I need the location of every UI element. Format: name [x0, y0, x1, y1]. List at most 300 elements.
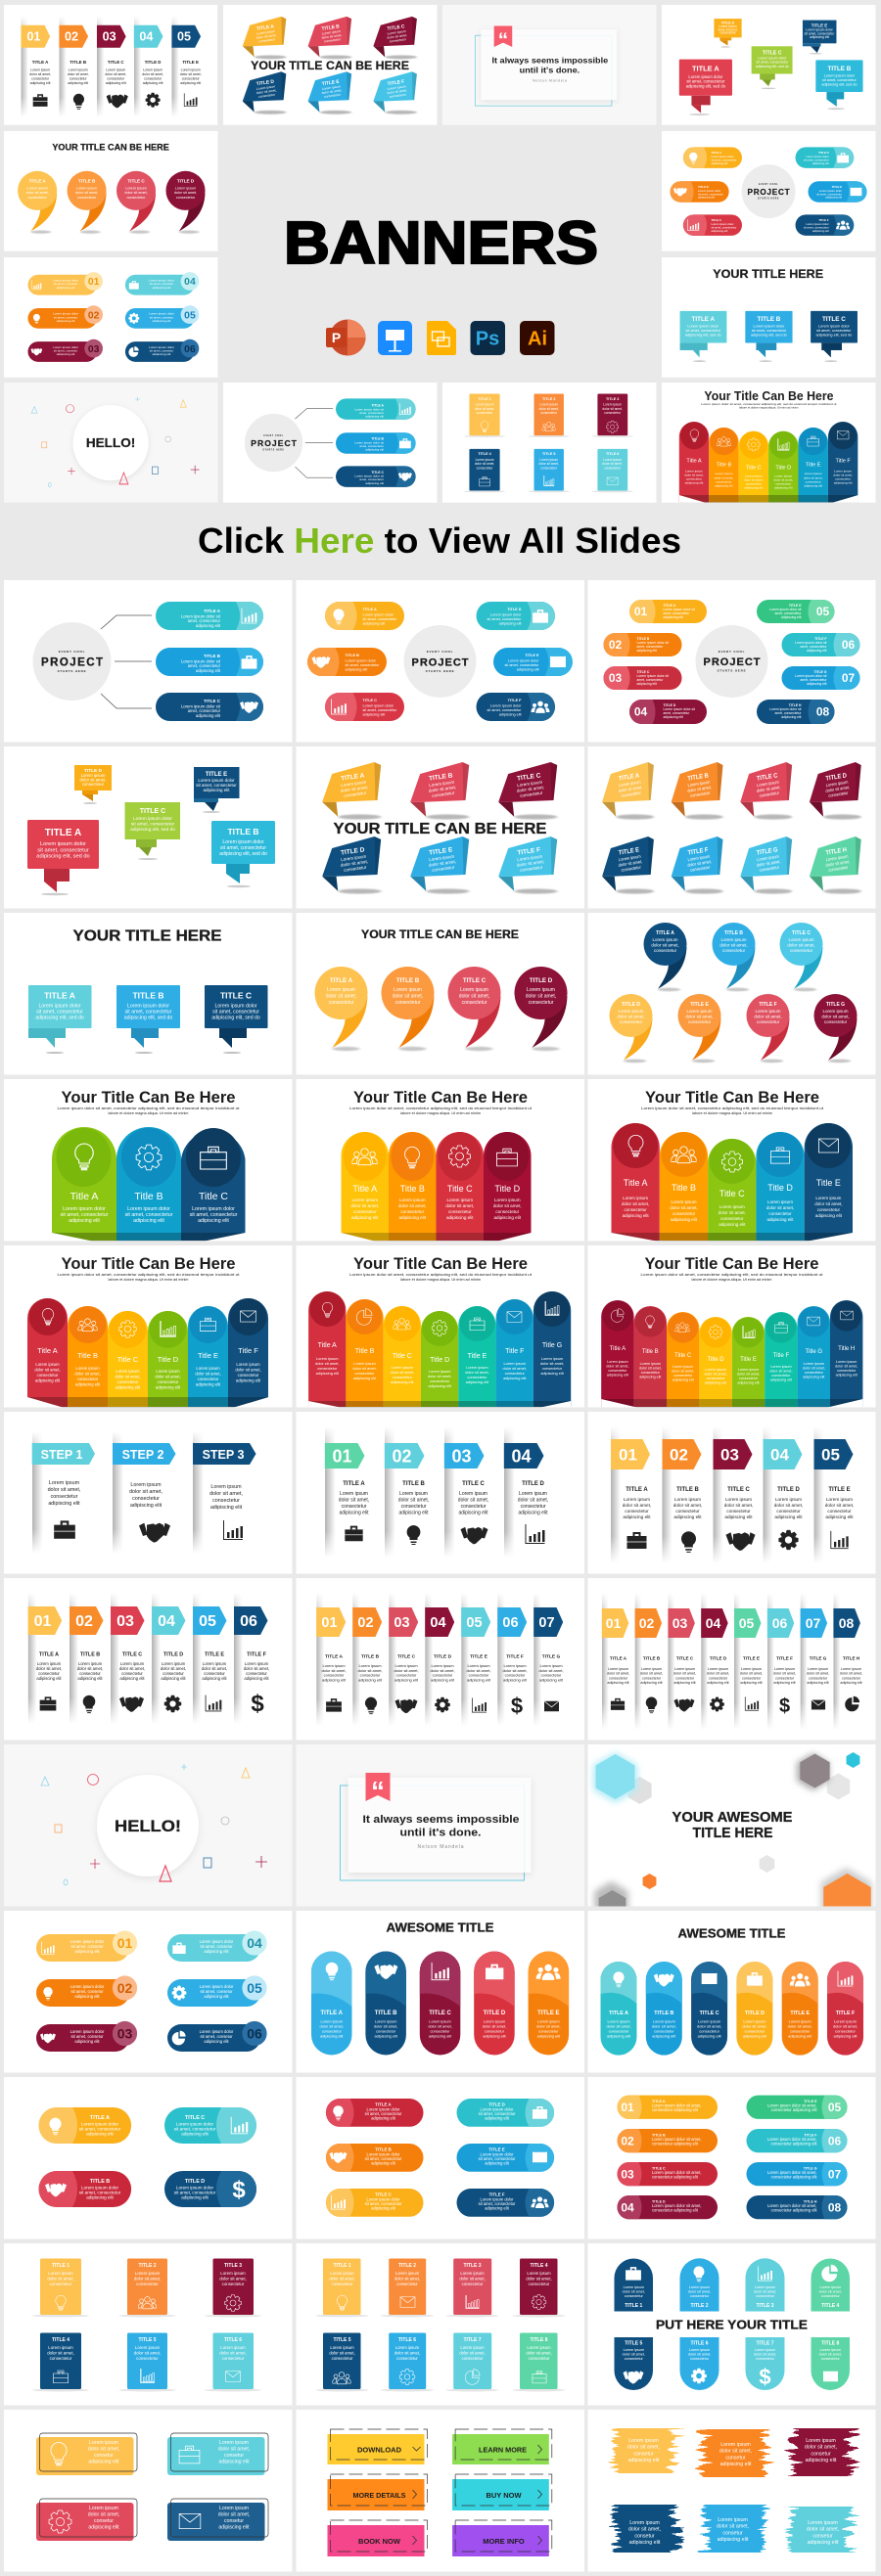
- brush: blue: dolor sit amet,: [717, 2524, 749, 2530]
- arrow: 06: TITLE F: [506, 1653, 524, 1659]
- column: title C: [708, 1139, 756, 1241]
- arrow: 03: 03: [720, 1446, 739, 1464]
- button: more details: MORE DETAILS: [352, 2491, 405, 2500]
- pill: title B: [156, 648, 263, 676]
- column: title A: adipiscing elit: [623, 1213, 649, 1218]
- pill: 06: Lorem ipsum dolor sit amet,: [767, 2137, 816, 2142]
- pill: 01: sit amet, consetur: [70, 1944, 104, 1949]
- column: title A: dolor sit amet,: [315, 1361, 339, 1366]
- arrow: 03: adipiscing elit: [673, 1681, 696, 1685]
- pill: 04: [167, 1930, 267, 1962]
- banner: title C: dolor sit amet,: [757, 785, 781, 793]
- brush: navy: Lorem ipsum: [629, 2520, 660, 2526]
- pill: 03: sit amet, consetur: [70, 2034, 104, 2039]
- card: title 2: TITLE 2: [138, 2263, 157, 2269]
- banner: title D: Lorem ipsum: [341, 854, 367, 862]
- column: title B: adipiscing elit: [75, 1381, 101, 1387]
- arrow: 04: 04: [511, 1446, 532, 1466]
- bubble: title E: [677, 994, 721, 1062]
- arrow: 03: Lorem ipsum: [459, 1491, 487, 1497]
- arch: title 3: dolor sit amet,: [754, 2289, 776, 2293]
- button: book now: [327, 2520, 427, 2556]
- arrow: 05: consectetur: [827, 1509, 852, 1514]
- pill: 07: adipiscing elit: [807, 682, 827, 686]
- bubble: title B: TITLE B: [396, 977, 420, 984]
- pill: 01: Lorem ipsum dolor sit amet,: [652, 2103, 702, 2107]
- bubble: title F: TITLE F: [759, 1002, 777, 1008]
- pill: title F: sit amet, consectetur: [479, 2201, 516, 2206]
- column: title E: Lorem ipsum: [738, 1368, 759, 1372]
- arrow: 05: dolor sit amet,: [740, 1672, 763, 1676]
- arrow: 04: consectetur: [433, 1673, 453, 1678]
- pill: title D: [476, 602, 555, 630]
- arrow: 01: Lorem ipsum: [322, 1663, 346, 1668]
- button: more details: [327, 2474, 427, 2510]
- thumbnail: four speech bubbles: [4, 131, 218, 251]
- arrow: 04: [152, 1606, 186, 1712]
- arrow: 04: 04: [158, 1613, 175, 1630]
- arch: title 7: dolor sit amet,: [754, 2352, 776, 2356]
- column: title C: Title C: [393, 1353, 412, 1360]
- banner: title A: consectetur: [344, 791, 367, 798]
- column: title A: [52, 1127, 116, 1241]
- arch: title 3: [746, 2258, 785, 2311]
- pill: title F: [476, 693, 555, 721]
- pill: 03: 03: [117, 2025, 132, 2041]
- column: title C: Lorem ipsum: [392, 1365, 413, 1370]
- pill: 06: amet, consectetur: [801, 645, 827, 649]
- pill: title A: adipiscing elit: [607, 2033, 631, 2039]
- project circle: EVERY COOL: [59, 650, 85, 654]
- column: title B: Title B: [77, 1351, 98, 1360]
- column: title D: Title D: [767, 1183, 793, 1193]
- column: title C: adipiscing elit: [116, 1385, 141, 1389]
- arrow: 06: consectetur: [505, 1673, 526, 1678]
- column: title C: Lorem ipsum: [446, 1198, 473, 1202]
- thumbnail: three ribbon cards: [662, 257, 876, 378]
- card: title 8: dolor sit amet,: [526, 2350, 552, 2356]
- pill: 02: 02: [621, 2135, 634, 2148]
- column: title D: [699, 1317, 732, 1407]
- pill: 02: Lorem ipsum dolor sit amet,: [652, 2137, 702, 2142]
- arrow: 06: adipiscing elit: [244, 1676, 269, 1681]
- pill: 02: adipiscing elit: [636, 649, 657, 653]
- column: title D: Lorem ipsum: [494, 1198, 521, 1202]
- column: title H: Lorem ipsum: [836, 1360, 857, 1364]
- arrow: 02: TITLE B: [80, 1651, 100, 1657]
- column: title C: adipiscing elit: [198, 1218, 229, 1224]
- column: title F: Lorem ipsum: [236, 1362, 260, 1367]
- bubble: title F: Lorem ipsum: [755, 1009, 781, 1014]
- bubble: title C: TITLE C: [463, 977, 487, 984]
- arrow: 01: [611, 1439, 651, 1549]
- pill: title B: dolor sit amet,: [374, 2023, 397, 2029]
- card: navy mail: adipiscing elit: [218, 2524, 250, 2530]
- pill: 03: TITLE C: [636, 670, 650, 674]
- card: title A: sit amet, consectetur: [36, 1010, 83, 1016]
- pill: 05: [167, 1975, 267, 2007]
- arrow: 05: [193, 1606, 227, 1711]
- pill: 08: Lorem ipsum dolor sit: [769, 707, 802, 711]
- arrow: 03: 03: [116, 1613, 134, 1630]
- pill: title C: sit amet, consectetur: [365, 2201, 402, 2206]
- pill: title C: consectetur: [430, 2029, 450, 2033]
- pill: 06: TITLE F: [804, 2133, 817, 2137]
- column: title A: adipiscing elit: [69, 1218, 100, 1224]
- pill: 01: adipiscing elit: [74, 1949, 100, 1954]
- card: teal briefcase: consetur: [224, 2453, 244, 2459]
- panel: three steps: [4, 1412, 292, 1573]
- button: buy now: BUY NOW: [486, 2491, 522, 2500]
- arrow: 01: [325, 1443, 369, 1541]
- arch: title 7: consectetur: [756, 2357, 775, 2361]
- pill: 01: 01: [634, 605, 647, 618]
- column: title G: adipiscing elit: [803, 1376, 824, 1379]
- pill: title F: adipiscing elit: [833, 2033, 858, 2039]
- pill: title F: sit amet, consectetur: [487, 708, 522, 712]
- arrow: 03: consectetur: [396, 1673, 417, 1678]
- arrow: 02: [70, 1606, 104, 1713]
- author: Nelson Mandela: [417, 1844, 464, 1850]
- arrow: 03: TITLE C: [727, 1487, 750, 1493]
- icon: Google Slides: [427, 321, 456, 355]
- column: title A: dolor sit amet,: [34, 1368, 61, 1372]
- banner: title B: dolor sit amet,: [429, 785, 456, 793]
- panel: six pills: [296, 2077, 584, 2238]
- icon: PowerPoint: P: [332, 330, 341, 345]
- pill: title F: Lorem ipsum dolor: [481, 2197, 514, 2201]
- arch: title 1: dolor sit amet,: [623, 2289, 645, 2293]
- panel: seven speech bubbles: [587, 913, 875, 1074]
- card: title 4: consectetur: [529, 2282, 550, 2286]
- pill: 05: sit amet, consetur: [200, 1989, 233, 1994]
- brush: teal: Lorem ipsum: [808, 2520, 838, 2526]
- card: yellow bulb: [36, 2433, 137, 2475]
- arrow: 06: Lorem ipsum: [245, 1661, 269, 1666]
- title: Your Title Can Be Here: [645, 1088, 819, 1107]
- arrow: 03: TITLE C: [462, 1481, 485, 1487]
- column: title A: consectetur: [625, 1207, 647, 1212]
- pill: title C: adipiscing elit: [698, 2033, 721, 2039]
- arrow: 03: Lorem ipsum: [394, 1663, 418, 1668]
- pill: title A: Lorem ipsum: [607, 2019, 630, 2023]
- pill: title B: Lorem ipsum dolor: [81, 2186, 118, 2190]
- pill: title A: consectetur: [322, 2029, 343, 2033]
- bubble: title A: TITLE A: [656, 930, 674, 936]
- pill: title C: TITLE C: [362, 699, 377, 702]
- column: title C: consectetur: [393, 1375, 413, 1379]
- arrow: 02: 02: [670, 1446, 688, 1464]
- banner: title F: Lorem ipsum: [517, 854, 543, 862]
- button: download: DOWNLOAD: [357, 2446, 402, 2454]
- arrow: 06: [497, 1607, 528, 1718]
- banner: title A: TITLE A: [618, 772, 640, 783]
- pill: title D: sit amet, consectetur: [174, 2190, 216, 2195]
- thumbnail: five numbered arrows: [4, 5, 217, 125]
- column: title E: adipiscing elit: [466, 1379, 489, 1384]
- ribbon: title C: adipiscing elit, sed do: [130, 827, 175, 833]
- arrow: 05: Lorem ipsum: [203, 1661, 227, 1666]
- card: title C: Lorem ipsum dolor: [215, 1004, 257, 1010]
- brush: blue: consetur: [722, 2530, 743, 2536]
- pill: title D: Lorem ipsum: [484, 2019, 505, 2023]
- column: title A: adipiscing elit: [607, 1374, 628, 1378]
- bubble: title B: Lorem ipsum: [720, 937, 747, 942]
- arrow: 01: TITLE A: [626, 1487, 648, 1493]
- arch: title 4: dolor sit amet,: [819, 2289, 842, 2293]
- pill: title C: Lorem ipsum dolor: [362, 704, 394, 708]
- pill: 04: Lorem ipsum dolor sit amet,: [652, 2203, 702, 2208]
- arrow: 04: TITLE D: [163, 1651, 183, 1657]
- pill: 02: amet, consectetur: [636, 645, 664, 649]
- banner: title H: TITLE H: [825, 846, 847, 857]
- column: title C: [437, 1132, 484, 1241]
- banner: title F: dolor sit amet,: [517, 859, 544, 868]
- bubble: title F: [746, 994, 790, 1062]
- column: title G: dolor sit amet,: [540, 1361, 564, 1366]
- arrow: 07: Lorem ipsum: [808, 1667, 828, 1671]
- arrow: 04: Lorem ipsum: [708, 1667, 728, 1671]
- card: title 2: Lorem ipsum: [135, 2271, 161, 2276]
- bubble: title B: [712, 923, 756, 991]
- pill: title B: consectetur: [654, 2029, 674, 2033]
- pill: 04: TITLE D: [664, 703, 676, 707]
- card: title B: [116, 985, 180, 1054]
- column: title E: dolor sit amet,: [195, 1372, 221, 1376]
- column: title B: adipiscing elit: [671, 1217, 698, 1222]
- column: title C: [108, 1311, 148, 1407]
- arrow: 03: consectetur: [675, 1676, 695, 1680]
- arrow: 07: TITLE G: [810, 1655, 827, 1661]
- card: title 3: dolor sit amet,: [219, 2276, 247, 2282]
- column: title G: [533, 1291, 571, 1407]
- pill: title F: TITLE F: [488, 2192, 505, 2197]
- arrow: 02: TITLE B: [643, 1655, 661, 1661]
- arch: title 7: [746, 2337, 785, 2390]
- hexagon: grey halo: [797, 1753, 829, 1790]
- pill: title D: adipiscing elit: [743, 2033, 767, 2039]
- bubble: title D: consectetur: [529, 1000, 554, 1006]
- arrow: 06: $: [251, 1691, 264, 1717]
- icon: PowerPoint: [326, 319, 366, 356]
- card: title 1: Lorem ipsum: [48, 2271, 73, 2276]
- arrow: 05: 05: [466, 1615, 483, 1631]
- arrow: 01: adipiscing elit: [623, 1514, 651, 1519]
- hexagon: light grey: [627, 1777, 652, 1804]
- column: title E: Lorem ipsum: [196, 1366, 220, 1371]
- card: title 4: consectetur: [50, 2356, 72, 2361]
- pill: 01: [617, 2096, 718, 2119]
- pill: 03: adipiscing elit: [74, 2039, 100, 2044]
- pill: title A: [156, 602, 263, 630]
- title: YOUR TITLE HERE: [72, 927, 222, 945]
- banner: title D: dolor sit amet,: [825, 785, 850, 793]
- bubble: title C: dolor sit amet,: [787, 943, 815, 947]
- pill: title D: Lorem ipsum dolor: [481, 2107, 514, 2111]
- pill: title A: [39, 2107, 131, 2144]
- column: title D: [484, 1132, 531, 1241]
- banner: title A: TITLE A: [341, 772, 365, 783]
- bubble: title E: Lorem ipsum: [686, 1009, 713, 1014]
- column: title B: Lorem ipsum dolor: [127, 1206, 170, 1212]
- banner: title D: TITLE D: [825, 772, 848, 783]
- pill: title B: TITLE B: [90, 2179, 110, 2185]
- arrow: 04: dolor sit amet,: [774, 1503, 803, 1508]
- pill: 03: amet, consectetur: [636, 678, 664, 682]
- card: yellow bulb: Lorem ipsum: [89, 2440, 118, 2446]
- pill: 01: adipiscing elit: [664, 615, 683, 619]
- column: title B: Lorem ipsum: [353, 1361, 376, 1366]
- banner: title G: [740, 836, 792, 894]
- pill: 05: 05: [828, 2101, 841, 2114]
- card: navy mail: dolor sit amet,: [218, 2512, 250, 2518]
- step 1: adipiscing elit: [48, 1501, 80, 1507]
- banner: title H: dolor sit amet,: [825, 859, 850, 868]
- card: title 4: Lorem ipsum: [527, 2271, 551, 2276]
- column: title G: adipiscing elit: [540, 1371, 565, 1376]
- pill: 08: [757, 700, 834, 724]
- arrow: 03: TITLE C: [122, 1651, 142, 1657]
- pill: 07: amet, consectetur: [801, 678, 827, 682]
- project circle: STARTS HERE: [718, 669, 746, 673]
- card: title 6: [205, 2332, 261, 2391]
- pill: title C: Lorem ipsum: [698, 2019, 721, 2023]
- pill: title F: Lorem ipsum: [834, 2019, 858, 2023]
- bubble: title B: TITLE B: [724, 930, 743, 936]
- column: title D: Title D: [158, 1355, 179, 1364]
- column: title A: adipiscing elit: [316, 1371, 340, 1376]
- pill: title B: TITLE B: [654, 2011, 673, 2016]
- step 1: Lorem ipsum: [49, 1480, 79, 1486]
- pill: title C: [691, 1962, 727, 2056]
- subtitle: Lorem ipsum dolor sit amet, consectetur adipiscing elit, sed do eiusmod tempor incididunt ut: [57, 1273, 241, 1277]
- pill: title A: adipiscing elit: [371, 2115, 396, 2121]
- pill: title B: dolor sit amet,: [652, 2023, 676, 2029]
- card: title 5: Lorem ipsum: [330, 2345, 354, 2350]
- arrow: 07: consectetur: [809, 1676, 828, 1680]
- column: title A: Title A: [37, 1346, 58, 1355]
- brush: orange: adipiscing elit: [720, 2462, 752, 2467]
- banner: title B: consectetur: [432, 791, 455, 798]
- panel: three arched columns: [4, 1079, 292, 1241]
- column: title C: consectetur: [117, 1379, 139, 1384]
- bubble: title D: TITLE D: [530, 977, 553, 984]
- arrow: 05: 05: [199, 1613, 216, 1630]
- pill: 05: adipiscing elit: [781, 615, 802, 619]
- card: teal briefcase: dolor sit amet,: [218, 2446, 250, 2452]
- column: title C: consectetur: [720, 1216, 744, 1221]
- column: title H: adipiscing elit: [836, 1374, 858, 1378]
- column: title F: Title F: [773, 1353, 789, 1359]
- arrow: 04: adipiscing elit: [518, 1511, 548, 1516]
- banner: title E: [410, 836, 470, 894]
- bubble: title E: dolor sit amet,: [685, 1014, 714, 1019]
- card: title 3: TITLE 3: [463, 2263, 482, 2269]
- bubble: title D: consectetur: [620, 1019, 643, 1024]
- pill: 02: TITLE B: [652, 2133, 666, 2137]
- arch: title 7: $: [759, 2365, 771, 2389]
- column: title D: Lorem ipsum: [429, 1369, 450, 1374]
- pill: title B: adipiscing elit: [652, 2033, 676, 2039]
- arrow: 01: TITLE A: [39, 1651, 59, 1657]
- pill: title E: dolor sit amet,: [788, 2023, 812, 2029]
- card: title A: [28, 985, 92, 1054]
- arrow: 05: adipiscing elit: [740, 1681, 763, 1685]
- arrow: 02: adipiscing elit: [77, 1676, 103, 1681]
- arrow: 05: consectetur: [469, 1673, 489, 1678]
- panel: five vertical pills: [296, 1911, 584, 2072]
- arrow: 05: TITLE E: [743, 1655, 760, 1661]
- pill: 02: sit amet, consetur: [70, 1989, 104, 1994]
- arrow: 05: 05: [739, 1615, 754, 1631]
- column: title B: Title B: [355, 1348, 375, 1355]
- pill: title E: adipiscing elit: [788, 2033, 812, 2039]
- hexagon: small orange: [643, 1874, 656, 1889]
- arrow: 05: consectetur: [204, 1671, 225, 1676]
- thumbnail: project three pills: [223, 383, 438, 503]
- pill: title B: sit amet, consectetur: [365, 2156, 402, 2161]
- panel: four arched columns: [296, 1079, 584, 1241]
- pill: title A: TITLE A: [204, 609, 221, 613]
- column: title A: [341, 1132, 389, 1241]
- column: title F: adipiscing elit: [770, 1378, 792, 1381]
- column: title C: Lorem ipsum: [116, 1369, 140, 1374]
- bubble: title B: consectetur: [395, 1000, 421, 1006]
- arrow: 02: consectetur: [675, 1509, 700, 1514]
- ribbon: title A: sit amet, consectetur: [37, 847, 89, 853]
- arrow: 01: Lorem ipsum: [608, 1667, 628, 1671]
- arrow: 05: Lorem ipsum: [467, 1663, 490, 1668]
- column: title D: consectetur: [430, 1378, 450, 1383]
- thumbnail: six cards: [442, 383, 657, 503]
- pill: title E: Lorem ipsum dolor: [481, 2152, 514, 2156]
- card: title 3: [205, 2258, 261, 2317]
- banner: title E: consectetur: [432, 865, 455, 873]
- pill: title E: [782, 1962, 818, 2056]
- ribbon: title A: TITLE A: [45, 828, 81, 838]
- arrow: 03: dolor sit amet,: [724, 1503, 753, 1508]
- arrow: 05: TITLE E: [470, 1653, 488, 1659]
- project circle: STARTS HERE: [58, 669, 86, 673]
- arch: title 6: dolor sit amet,: [688, 2352, 711, 2356]
- step 3: [193, 1443, 256, 1540]
- column: title A: Lorem ipsum: [351, 1198, 378, 1202]
- panel: hello slide: [4, 1744, 292, 1906]
- column: title A: Title A: [624, 1178, 647, 1188]
- card: title 2: dolor sit amet,: [134, 2276, 161, 2282]
- hexagon: grey halo bottom: [591, 1878, 632, 1906]
- arrow: 04: Lorem ipsum: [519, 1491, 547, 1497]
- column: title C: Title C: [447, 1184, 473, 1194]
- column: title C: dolor sit amet,: [672, 1370, 694, 1374]
- pill: 01: 01: [117, 1935, 132, 1951]
- pill: title C: Lorem ipsum dolor sit: [181, 703, 221, 708]
- banner: title B: TITLE B: [687, 772, 710, 783]
- pill: 01: Lorem ipsum dolor: [70, 1939, 104, 1944]
- pill: 02: Lorem ipsum dolor: [70, 1984, 104, 1989]
- hello circle: [97, 1775, 199, 1876]
- bubble: title C: [779, 923, 823, 991]
- arrow: 08: dolor sit amet,: [840, 1672, 862, 1676]
- column: title D: dolor sit amet,: [428, 1374, 451, 1378]
- project circle: [695, 625, 767, 698]
- pill: title D: Lorem ipsum: [743, 2019, 766, 2023]
- column: title D: dolor sit amet,: [705, 1372, 727, 1376]
- arrow: 01: adipiscing elit: [322, 1677, 347, 1682]
- subtitle line 2: labore et dolore magna aliqua. Ut enim ad minim: [109, 1278, 188, 1282]
- card: title 1: dolor sit amet,: [47, 2276, 74, 2282]
- ribbon: title A: adipiscing elit, sed do: [36, 854, 90, 860]
